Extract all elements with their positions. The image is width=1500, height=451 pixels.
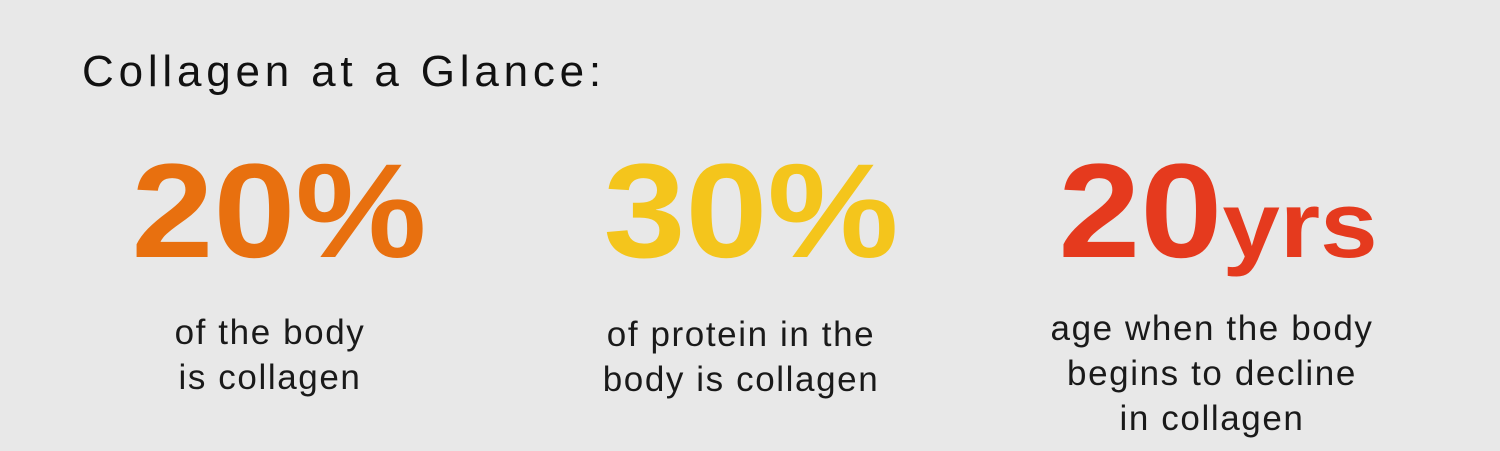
caption: of protein in the	[607, 315, 875, 354]
stat: 30% protein	[603, 137, 899, 399]
title: Collagen at a Glance:	[82, 47, 606, 96]
stat: 20% body	[131, 137, 427, 397]
number 20%: 20%	[131, 137, 427, 286]
caption: age when the body	[1050, 309, 1374, 348]
caption: body is collagen	[603, 360, 879, 399]
caption: of the body	[175, 313, 365, 352]
caption	[1050, 309, 1374, 438]
number 30%: 30%	[603, 137, 899, 286]
caption	[603, 315, 879, 399]
caption: begins to decline	[1067, 354, 1357, 393]
stat: 20yrs age	[1050, 137, 1378, 438]
caption: in collagen	[1120, 399, 1304, 438]
number 20yrs: 20yrs	[1058, 137, 1378, 286]
caption	[175, 313, 365, 397]
caption: is collagen	[178, 358, 361, 397]
